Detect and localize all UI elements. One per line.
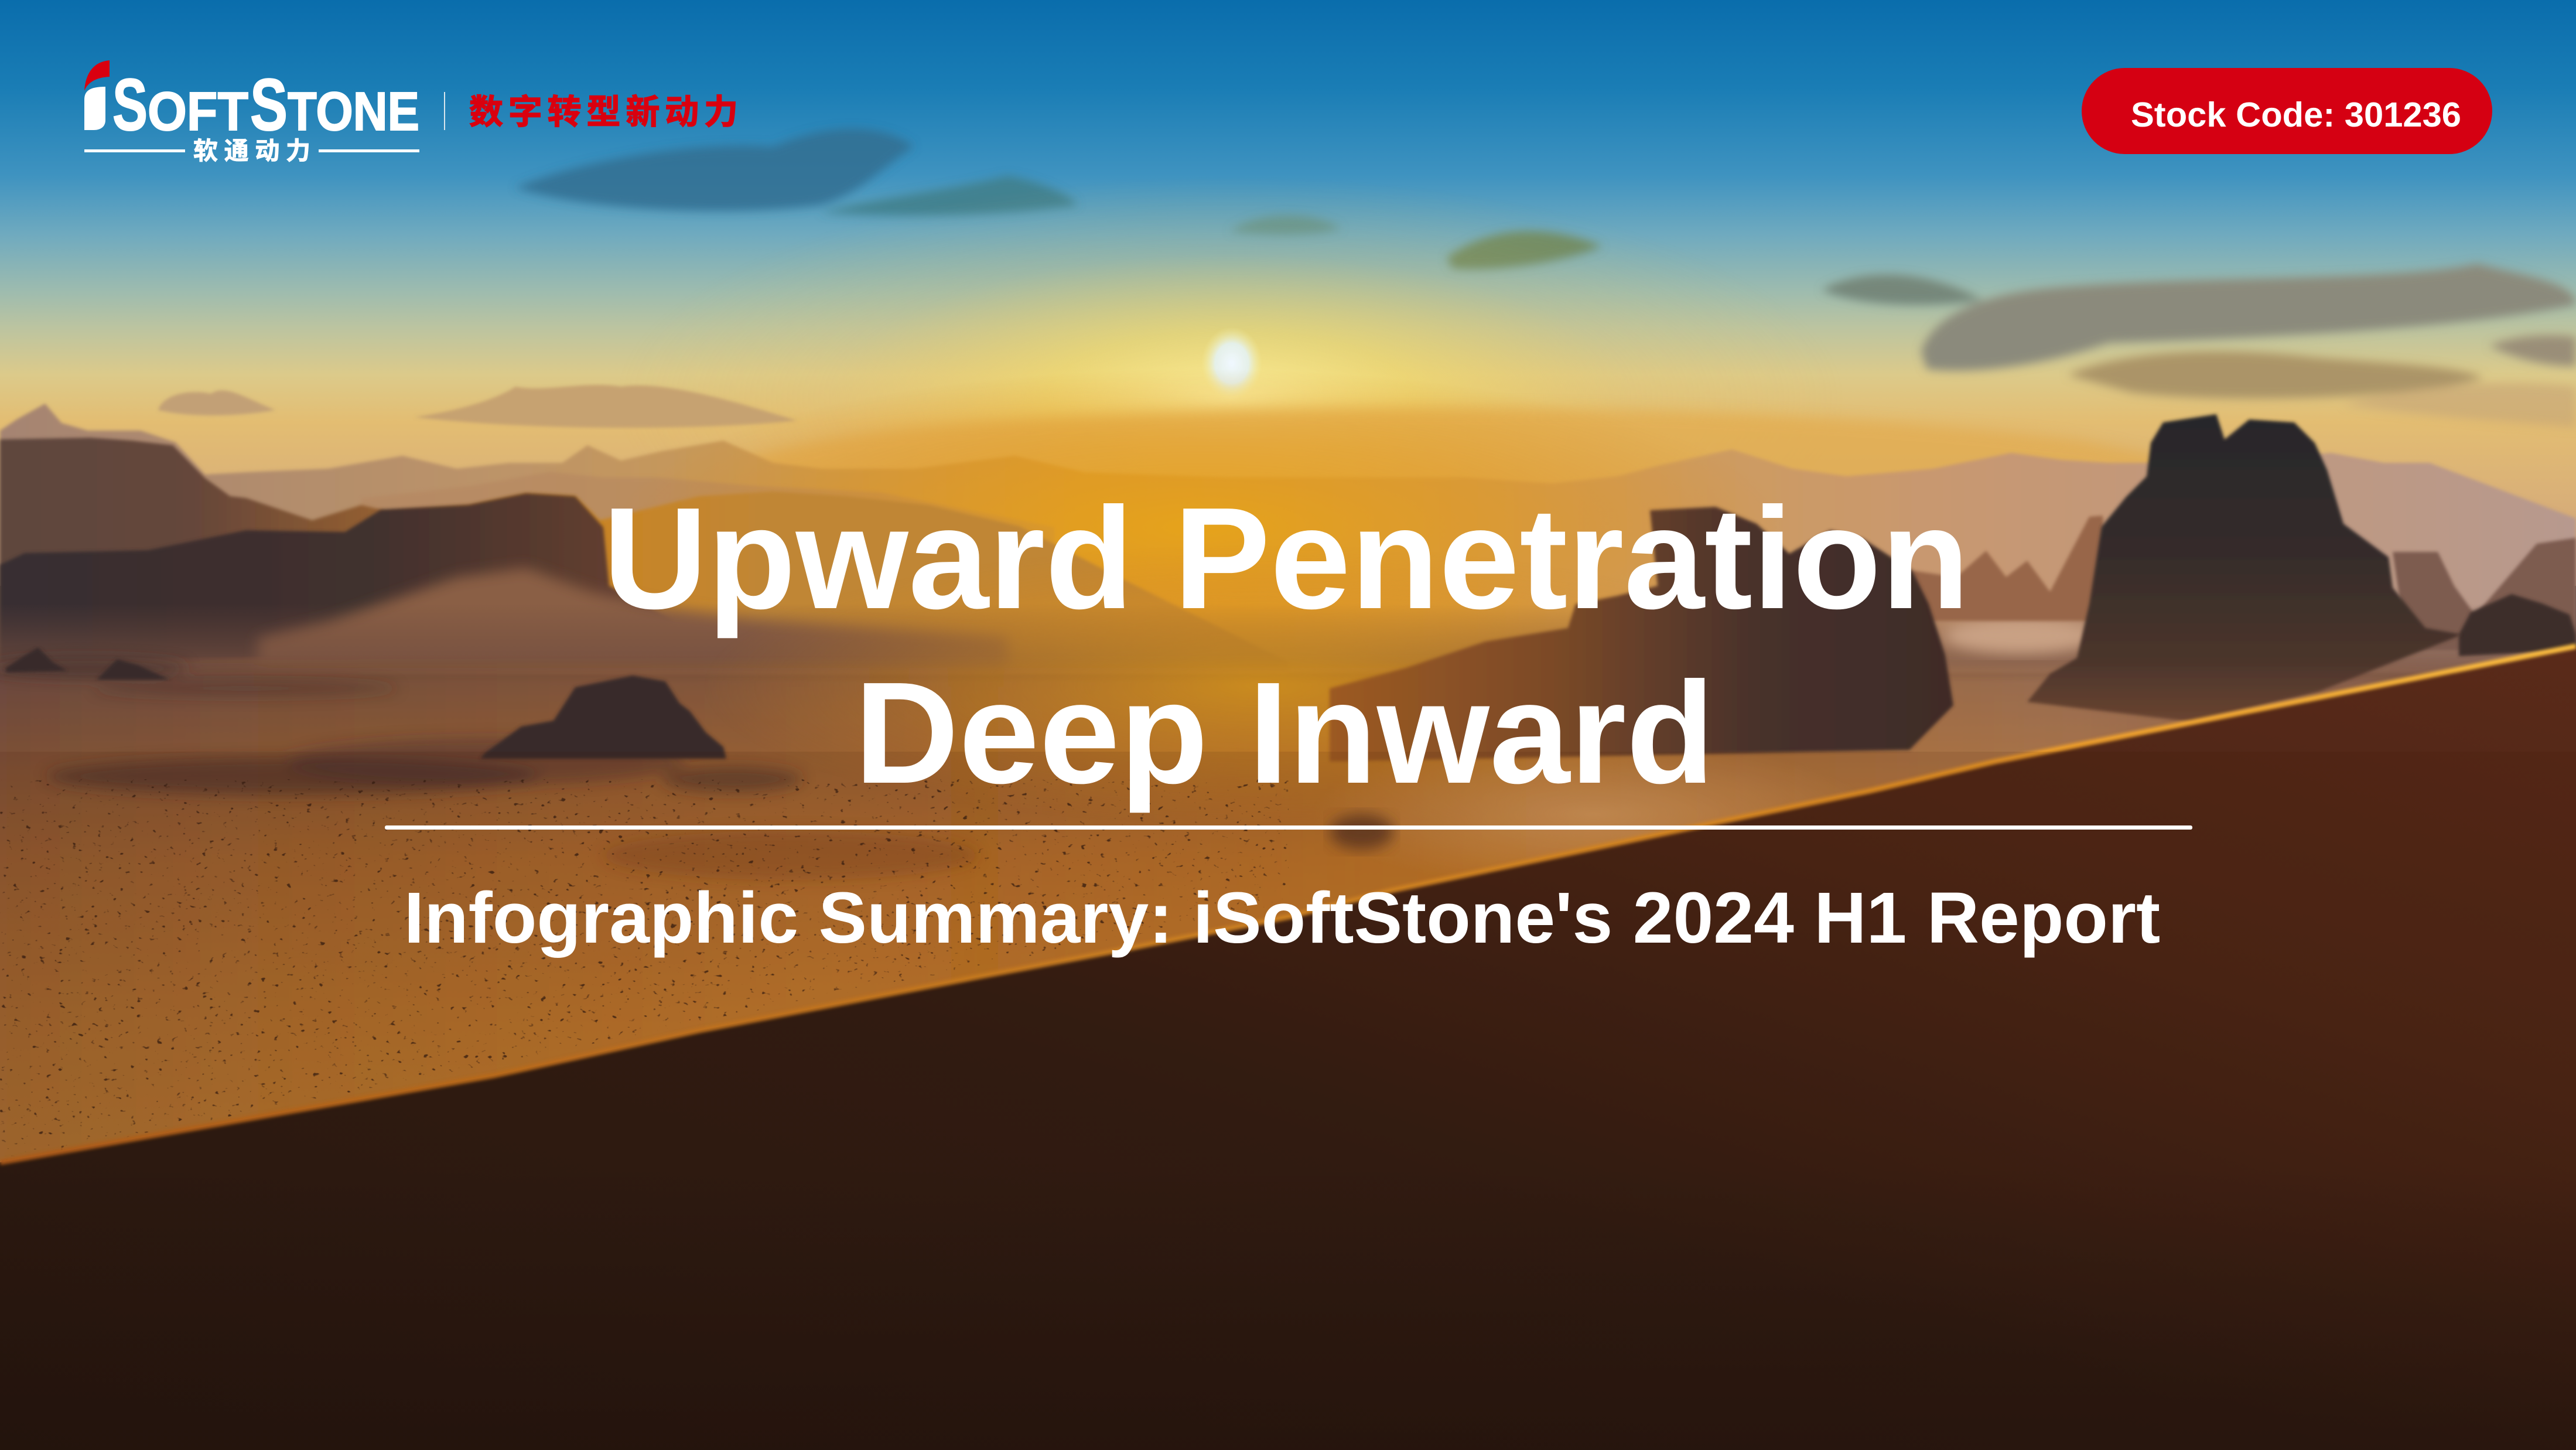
- sandstone spires: [1912, 516, 2109, 621]
- pale sand near the dune crest: [1312, 738, 1874, 891]
- desert floor: [0, 603, 2576, 1172]
- sun glow: [615, 176, 1845, 621]
- logo red flame: [84, 60, 110, 91]
- dark shadow streaks: [0, 659, 978, 880]
- logo wordmark: OFT: [148, 81, 248, 142]
- ground speckle texture: [0, 779, 1289, 1166]
- ground base: [0, 603, 2576, 1172]
- subtitle: Infographic Summary: iSoftStone's 2024 H1 Report: [404, 878, 2160, 958]
- logo chinese name: 软通动力: [193, 137, 310, 165]
- badge label: Stock Code: 301236: [2131, 95, 2461, 134]
- ground orange glow below the sun: [703, 545, 1816, 826]
- title line 2: Deep Inward: [855, 652, 1714, 814]
- logo right line: [319, 149, 419, 152]
- small rock mounds left: [6, 647, 170, 680]
- sun disc: [1201, 327, 1262, 400]
- pale riverbed: [1945, 618, 2097, 653]
- title divider rule: [385, 825, 2192, 830]
- sky gradient: [0, 0, 2576, 586]
- small butte on the plain: [480, 675, 726, 759]
- darker overlay band: [0, 752, 2576, 1450]
- logo divider: [444, 92, 445, 130]
- glowing dune ridge: [0, 646, 2576, 1162]
- left mountain mass: [0, 438, 1289, 674]
- logo slogan: 数字转型新动力: [469, 93, 738, 131]
- middle hazy ridge: [361, 472, 1054, 586]
- distant figure on the sand: [1330, 814, 1394, 849]
- right distant rocks: [2393, 538, 2576, 650]
- central rock formation: [1330, 507, 1953, 762]
- foreground dune: [0, 646, 2576, 1450]
- glowing cloud bank behind the ridge: [732, 408, 2314, 527]
- logo left line: [84, 149, 185, 152]
- tall rock pillar: [2027, 414, 2462, 722]
- logo wordmark: S: [250, 64, 288, 146]
- low sun haze: [615, 369, 1786, 685]
- stock code badge: [2082, 68, 2492, 154]
- logo wordmark: TONE: [288, 81, 419, 142]
- logo: iSoftStone: [84, 60, 738, 165]
- main title: [603, 477, 1970, 814]
- low rock at right edge: [2459, 594, 2576, 656]
- far mountain ridge: [0, 404, 2576, 674]
- ground warm tint: [0, 668, 2576, 1172]
- dune lower shading: [0, 1166, 2576, 1450]
- dark foreground range: [0, 493, 674, 662]
- title line 1: Upward Penetration: [603, 477, 1970, 639]
- clouds in upper sky: [515, 129, 2576, 428]
- logo wordmark: S: [112, 64, 148, 146]
- logo wordmark: [112, 64, 419, 146]
- badge pill: [2082, 68, 2492, 154]
- sand dune below the range: [258, 568, 1007, 674]
- logo letter i: [84, 87, 105, 130]
- horizon clouds left: [158, 385, 797, 428]
